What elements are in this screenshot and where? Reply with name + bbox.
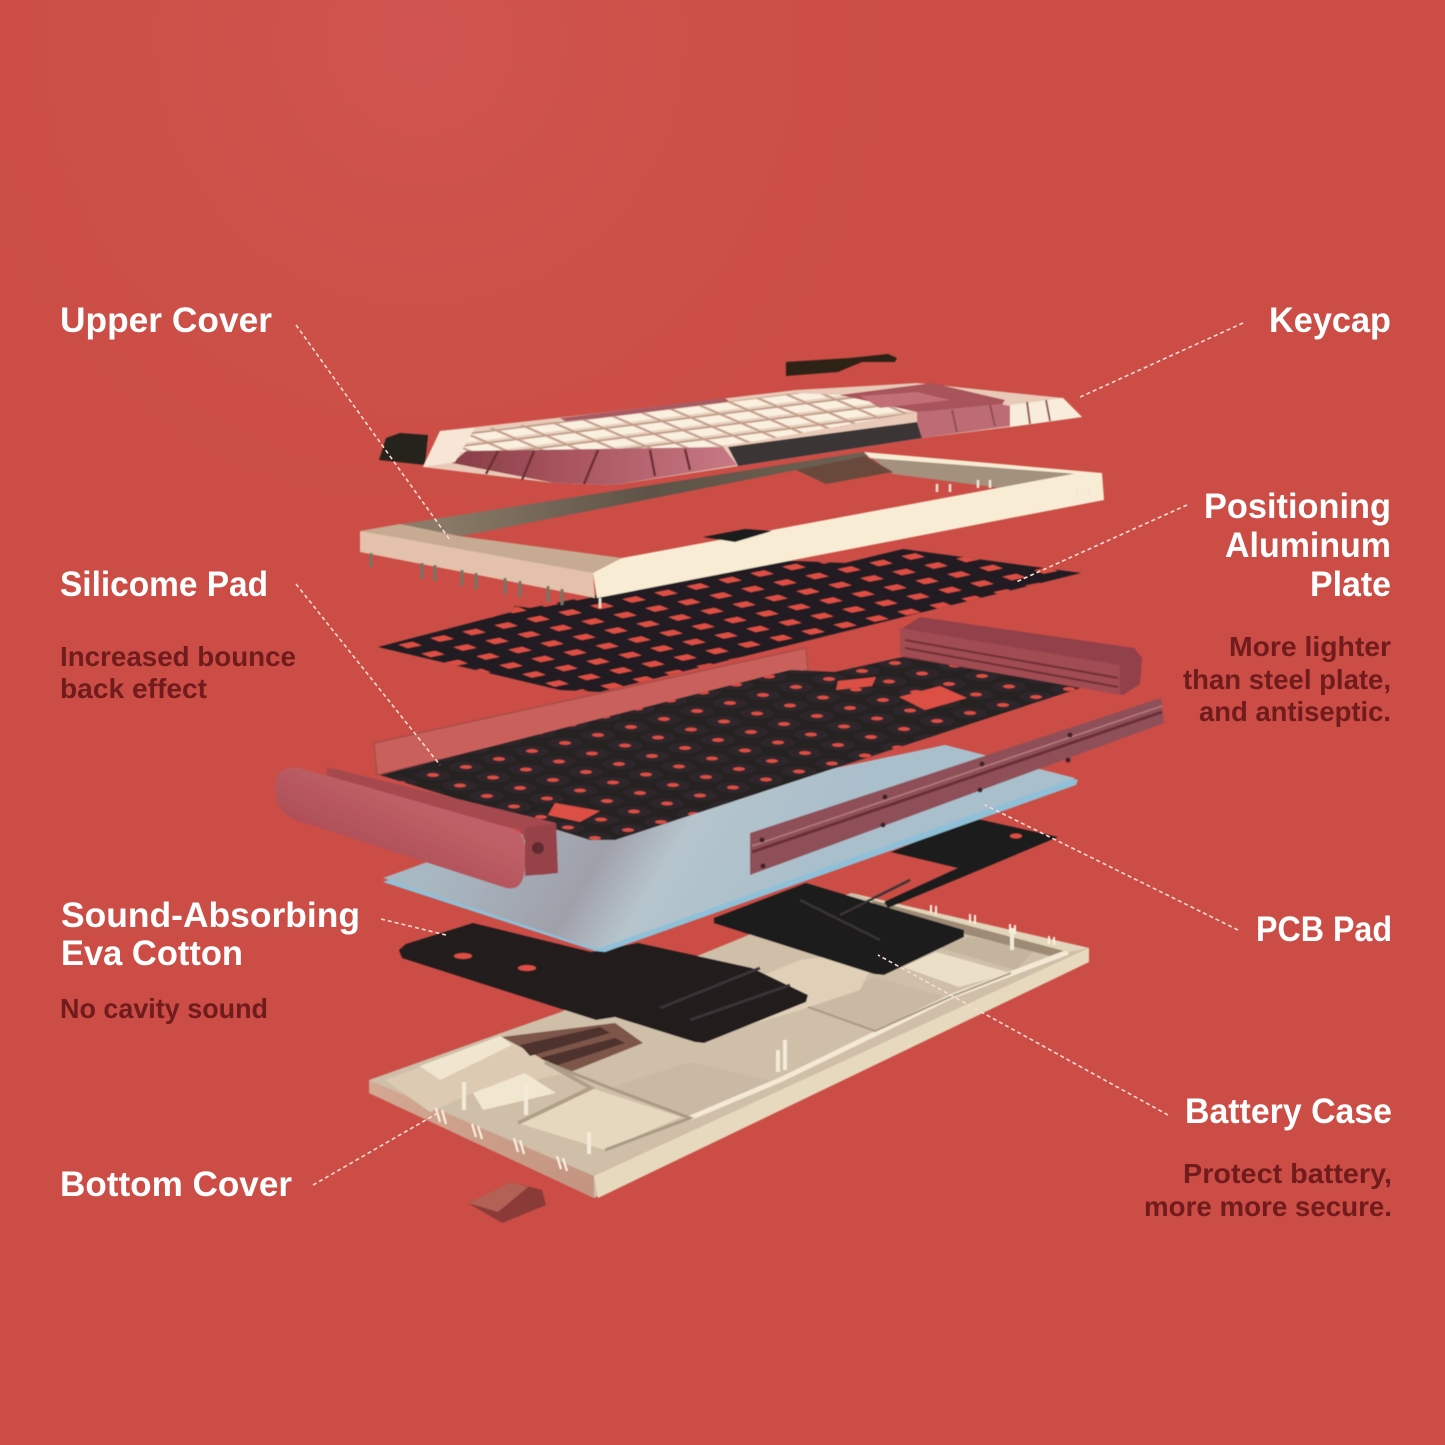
label: bottom cover: Bottom Cover: [60, 1165, 292, 1204]
keycap set: [379, 383, 1082, 485]
label: silicone pad: Increased bounce: [60, 641, 296, 672]
label: positioning aluminum plate: and antiseptic.: [1199, 696, 1391, 727]
label: positioning aluminum plate: [1183, 487, 1391, 727]
label: positioning aluminum plate: than steel plate,: [1183, 664, 1391, 695]
label: battery case: [1144, 1092, 1392, 1222]
label: battery case: Protect battery,: [1183, 1158, 1392, 1189]
label: keycap: Keycap: [1269, 301, 1391, 340]
front long rail: [750, 698, 1164, 875]
label: pcb pad: PCB Pad: [1256, 910, 1392, 949]
label: positioning aluminum plate: Positioning: [1204, 487, 1391, 526]
label: upper cover: Upper Cover: [60, 301, 272, 340]
label: positioning aluminum plate: More lighter: [1229, 631, 1391, 662]
label: positioning aluminum plate: Plate: [1310, 565, 1391, 604]
label: silicone pad: [60, 565, 296, 704]
label: sound-absorbing eva cotton: [60, 896, 360, 1024]
bottom cover tray: [369, 893, 1089, 1198]
label: positioning aluminum plate: Aluminum: [1225, 526, 1391, 565]
small latch piece: [468, 1182, 546, 1223]
illustration: exploded keyboard layers: [275, 354, 1164, 1223]
label: battery case: more more secure.: [1144, 1191, 1392, 1222]
label: sound-absorbing eva cotton: Eva Cotton: [61, 934, 243, 973]
sound-absorbing eva cotton: [399, 923, 808, 1043]
positioning aluminum plate: [378, 549, 1081, 692]
silicone pad: [380, 655, 1080, 840]
battery case: [714, 818, 1058, 975]
label: sound-absorbing eva cotton: No cavity sound: [60, 993, 268, 1024]
label: battery case: Battery Case: [1185, 1092, 1392, 1131]
label: silicone pad: Silicome Pad: [60, 565, 268, 604]
label: sound-absorbing eva cotton: Sound-Absorbing: [61, 896, 360, 935]
left end pill: [275, 767, 558, 889]
leader lines: [296, 323, 1243, 1185]
pcb pad: [383, 745, 1078, 952]
label: silicone pad: back effect: [60, 673, 207, 704]
upper cover frame: [360, 452, 1104, 608]
right end piece: [900, 617, 1142, 695]
top knob piece: [786, 354, 897, 376]
translucent rear rail: [374, 648, 808, 775]
